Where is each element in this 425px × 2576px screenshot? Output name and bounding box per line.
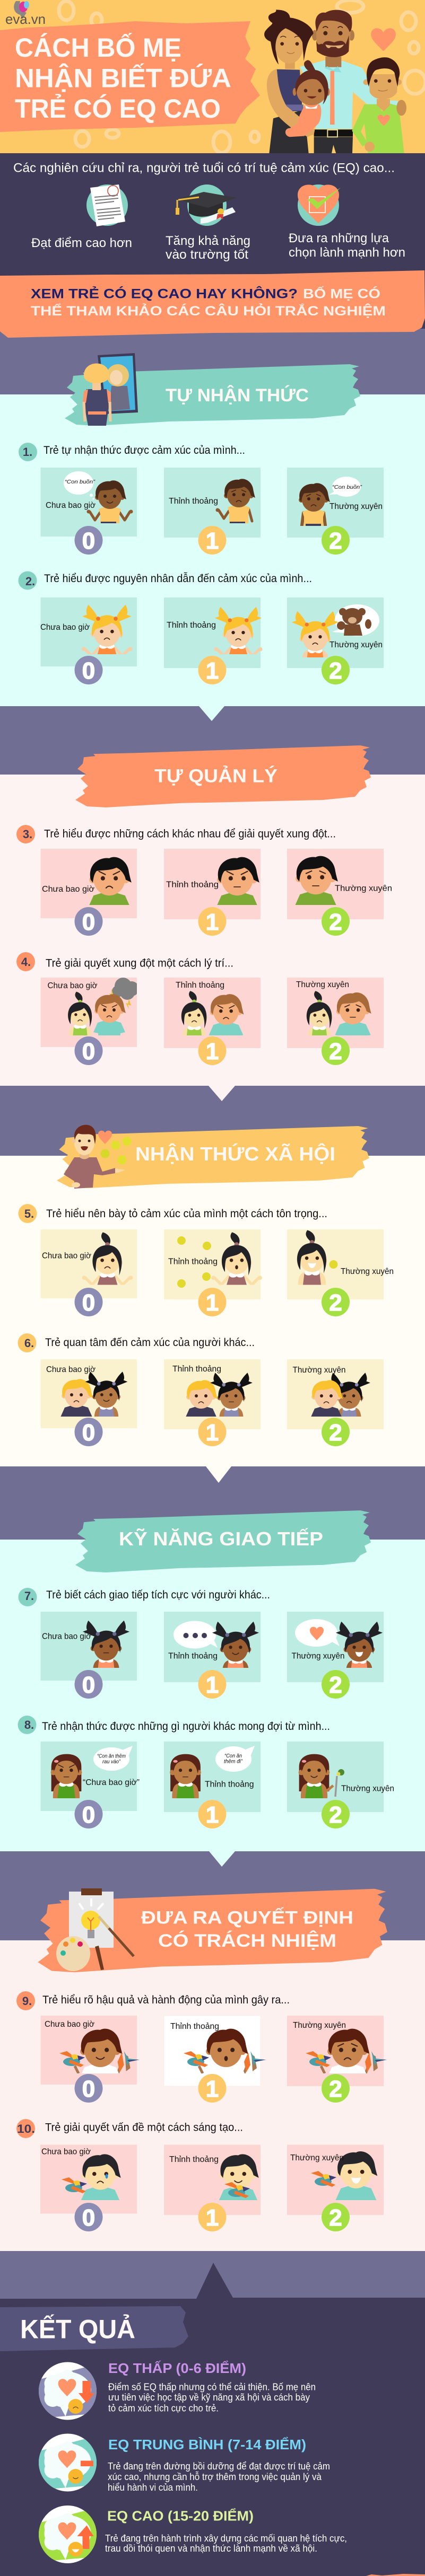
card: never: [40, 468, 137, 555]
label: Chưa bao giờ: [42, 1251, 91, 1261]
card: sometimes: [164, 1612, 261, 1699]
call-to-action band: [0, 270, 425, 338]
icon: brain with minus: [36, 2433, 100, 2492]
question text: Trẻ biết cách giao tiếp tích cực với người khác...: [46, 1589, 270, 1601]
label: Thường xuyên: [329, 502, 383, 511]
score 0: 0: [82, 2205, 95, 2231]
score 2: [322, 656, 350, 684]
label: Thỉnh thoảng: [172, 1365, 221, 1374]
card: sometimes: [164, 1742, 261, 1828]
score 0: [74, 1670, 103, 1699]
score 0: 0: [82, 1290, 95, 1316]
girl and boy frowning: [181, 991, 244, 1035]
description: xúc cao, nhưng cần hỗ trợ thêm trong việc quản lý và: [108, 2471, 322, 2482]
badge 9: 9.: [22, 1994, 32, 2008]
blonde girl one arm out: [214, 606, 263, 654]
label: Thường xuyên: [335, 884, 392, 893]
speech bubble: rau vào”: [102, 1759, 121, 1765]
card: never: [40, 1229, 137, 1316]
question 1: [19, 443, 384, 555]
icon: graduation cap: [176, 184, 237, 226]
label: Chưa bao giờ: [48, 981, 98, 990]
question 7: [18, 1588, 384, 1699]
banner: communication skills: [75, 1510, 371, 1572]
label: Thường xuyên: [341, 1267, 394, 1276]
score 0: 0: [82, 1420, 95, 1446]
label: Chưa bao giờ: [42, 1632, 91, 1641]
description: [105, 2533, 347, 2554]
badge 10: [16, 2119, 35, 2138]
results heading: KẾT QUẢ: [20, 2315, 135, 2344]
score 0: [74, 907, 103, 936]
boy and girl looking: [185, 1373, 253, 1432]
question 9: [16, 1991, 387, 2103]
badge 10: 10.: [17, 2122, 35, 2135]
call-to-action text: [31, 285, 386, 319]
call-to-action text: XEM TRẺ CÓ EQ CAO HAY KHÔNG?: [31, 285, 298, 301]
intro panel: [0, 153, 425, 278]
heading: EQ CAO (15-20 ĐIỂM): [107, 2508, 254, 2524]
score 1: 1: [206, 1420, 219, 1446]
score 0: 0: [82, 1039, 95, 1065]
girl arms crossed: [51, 1754, 82, 1808]
score 2: [322, 907, 350, 936]
label: higher grades: Đạt điểm cao hơn: [31, 236, 132, 250]
score 0: 0: [82, 528, 95, 554]
girl smiling: [212, 1622, 259, 1685]
score 0: [74, 2203, 103, 2231]
heading: EQ THẤP (0-6 ĐIỂM): [108, 2360, 246, 2376]
illustration: family: [264, 10, 406, 153]
card: sometimes: [164, 978, 261, 1065]
score 0: [74, 1418, 103, 1446]
badge 7: 7.: [24, 1589, 34, 1603]
card: often: [287, 849, 392, 936]
banner: responsible decisions: [38, 1889, 387, 1972]
heading: TỰ QUẢN LÝ: [154, 766, 277, 787]
score 1: 1: [206, 658, 219, 684]
fork with broccoli: [327, 1769, 344, 1797]
boy surprised with broken plane: [184, 2029, 266, 2098]
score 2: [322, 2203, 350, 2231]
question text: Trẻ hiểu được nguyên nhân dẫn đến cảm xúc của mình...: [44, 573, 312, 585]
label: Thường xuyên: [292, 1652, 345, 1660]
question 6: [18, 1333, 384, 1446]
card: often: [287, 1359, 384, 1446]
boy sad with broken plane: [306, 2029, 387, 2098]
question text: Trẻ giải quyết vấn đề một cách sáng tạo...: [45, 2122, 243, 2133]
score 2: 2: [329, 528, 342, 554]
label: Thường xuyên: [329, 640, 383, 649]
score 1: [198, 907, 226, 936]
card: never: [40, 1742, 140, 1828]
label: Thường xuyên: [293, 1366, 346, 1375]
badge 3: 3.: [23, 828, 32, 841]
label: Thường xuyên: [293, 2021, 346, 2030]
label: Thỉnh thoảng: [169, 2155, 219, 2164]
thought bubble: “Con buồn”: [65, 479, 96, 485]
label: Thỉnh thoảng: [166, 880, 219, 890]
section 5: responsible decisions: [0, 1888, 425, 2251]
score 2: [322, 2074, 350, 2103]
score 0: [74, 526, 103, 555]
score 2: 2: [329, 2076, 342, 2102]
label: Thường xuyên: [290, 2153, 344, 2162]
score 1: 1: [206, 1039, 219, 1065]
banner: self management: [75, 745, 371, 807]
label: Chưa bao giờ: [45, 2020, 94, 2029]
boy slightly annoyed: [217, 857, 259, 905]
description: trau dồi thói quen và nhận thức lành mạnh về xã hội.: [105, 2543, 317, 2554]
score 1: 1: [206, 909, 219, 935]
badge 2: [18, 572, 37, 590]
heading: KỸ NĂNG GIAO TIẾP: [119, 1527, 323, 1550]
label: Thỉnh thoảng: [168, 1652, 218, 1660]
daughter: [285, 60, 330, 137]
card: never: [40, 849, 137, 936]
question text: Trẻ nhận thức được những gì người khác mong đợi từ mình...: [42, 1720, 330, 1733]
bubble with heart: [295, 1619, 340, 1647]
results panel: [0, 2263, 425, 2576]
question text: Trẻ quan tâm đến cảm xúc của người khác...: [45, 1337, 255, 1349]
boy holding plane: [219, 2154, 259, 2219]
icon: brain with down arrow: [36, 2362, 100, 2420]
title: [15, 32, 231, 124]
badge 4: [16, 952, 35, 971]
badge 5: [18, 1204, 37, 1223]
question 2: [18, 572, 384, 684]
label: better school: [166, 234, 250, 262]
speech bubble: “Con ăn thêm: [97, 1754, 126, 1759]
question 8: [18, 1716, 394, 1828]
description: [108, 2461, 330, 2493]
score 2: [322, 526, 350, 555]
thought bubble: [64, 471, 96, 499]
card: sometimes: [164, 468, 261, 555]
icon: heart with checkmark: [298, 184, 341, 226]
badge 3: [16, 825, 35, 843]
call-to-action text: THỂ THAM KHẢO CÁC CÂU HỎI TRẮC NGHIỆM: [31, 303, 386, 319]
label: Thường xuyên: [296, 980, 349, 989]
score 0: 0: [82, 909, 95, 935]
card: often: [287, 1229, 394, 1316]
boy and girl apart: [60, 1371, 127, 1431]
score 0: [74, 1288, 103, 1316]
description: tỏ cảm xúc tích cực cho trẻ.: [108, 2403, 219, 2413]
hero background: [0, 0, 425, 153]
card: often: [287, 978, 384, 1065]
score 2: [322, 1670, 350, 1699]
girl laughing: [336, 1622, 383, 1685]
score 1: 1: [206, 1290, 219, 1316]
speech bubble: “Con buồn”: [332, 484, 362, 490]
score 2: [322, 1800, 350, 1828]
badge 6: [18, 1333, 36, 1352]
card: never: [40, 1359, 137, 1446]
score 0: [74, 2074, 103, 2103]
question 5: [18, 1204, 394, 1316]
son: [352, 57, 406, 153]
mother: [264, 10, 315, 153]
score 1: [198, 526, 226, 555]
label: Thỉnh thoảng: [169, 497, 218, 506]
badge 5: 5.: [24, 1207, 34, 1220]
emotion faces: [177, 1236, 211, 1288]
speech bubble: [329, 477, 362, 497]
badge 9: [16, 1991, 35, 2010]
heading: ĐƯA RA QUYẾT ĐỊNH: [141, 1907, 353, 1928]
result: high EQ: [36, 2505, 347, 2563]
boy calm: [295, 856, 338, 905]
score 1: 1: [206, 1802, 219, 1828]
question text: Trẻ hiểu được những cách khác nhau để giải quyết xung đột...: [44, 828, 336, 840]
call-to-action text: BỐ MẸ CÓ: [303, 285, 380, 301]
card: never: [40, 2016, 140, 2103]
score 2: 2: [329, 1672, 342, 1698]
label: Chưa bao giờ: [41, 2147, 91, 2157]
badge 8: 8.: [24, 1718, 34, 1731]
badge 8: [18, 1716, 36, 1734]
description: hiểu hành vi của mình.: [108, 2482, 198, 2493]
question text: Trẻ giải quyết xung đột một cách lý trí...: [46, 957, 233, 969]
description: Điểm số EQ thấp nhưng có thể cải thiện. Bố mẹ nên: [108, 2381, 316, 2392]
card: often: [287, 468, 384, 555]
card: sometimes: [164, 1359, 261, 1446]
score 0: 0: [82, 2076, 95, 2102]
score 2: 2: [329, 658, 342, 684]
card: often: [287, 2016, 387, 2103]
card: often: [287, 1742, 394, 1828]
description: [108, 2381, 316, 2413]
girl and boy calm: [307, 991, 371, 1035]
girl eating vegetables: [299, 1754, 329, 1808]
score 1: [198, 2074, 226, 2103]
badge 2: 2.: [25, 575, 35, 588]
description: Trẻ đang trên hành trình xây dựng các mối quan hệ tích cực,: [105, 2533, 347, 2544]
banner: self awareness: [65, 364, 360, 426]
question text: Trẻ hiểu rõ hậu quả và hành động của mình gây ra...: [42, 1994, 290, 2006]
title: CÁCH BỐ MẸ: [15, 32, 181, 63]
section 1: self awareness: [0, 353, 425, 721]
result: low EQ: [36, 2360, 316, 2420]
score 0: [74, 1036, 103, 1065]
girl neutral: [170, 1754, 201, 1808]
title: NHẬN BIẾT ĐỨA: [15, 64, 231, 93]
heading: EQ TRUNG BÌNH (7-14 ĐIỂM): [108, 2437, 306, 2452]
card: often: [287, 1612, 384, 1699]
score 2: 2: [329, 1290, 342, 1316]
score 1: [198, 2203, 226, 2231]
blonde girl shrugging: [82, 604, 133, 654]
score 1: [198, 1418, 226, 1446]
boy smiling, shrugging: [87, 480, 133, 523]
label: “Chưa bao giờ”: [83, 1778, 140, 1787]
boy laughing with repaired plane: [311, 2151, 377, 2219]
girl speaking: [211, 1232, 262, 1285]
score 1: [198, 1036, 226, 1065]
score 1: 1: [206, 528, 219, 554]
card: sometimes: [164, 597, 263, 684]
score 0: 0: [82, 658, 95, 684]
badge 4: 4.: [21, 955, 31, 969]
hero title brush: [0, 21, 260, 132]
icon: brain with up arrow: [36, 2505, 100, 2563]
score 1: [198, 1288, 226, 1316]
heading: NHẬN THỨC XÃ HỘI: [135, 1142, 335, 1165]
label: Chưa bao giờ: [46, 501, 96, 510]
question text: Trẻ hiểu nên bày tỏ cảm xúc của mình một cách tôn trọng...: [46, 1208, 327, 1220]
label: Thỉnh thoảng: [176, 981, 224, 990]
intro text: Các nghiên cứu chỉ ra, người trẻ tuổi có trí tuệ cảm xúc (EQ) cao...: [13, 161, 395, 175]
coral heart: [371, 28, 396, 51]
label: healthier choices: chọn lành mạnh hơn: [289, 245, 405, 260]
label: better school: Tăng khả năng: [166, 234, 250, 248]
label: Thỉnh thoảng: [170, 2022, 219, 2031]
score 1: [198, 656, 226, 684]
label: Chưa bao giờ: [40, 623, 90, 632]
score 1: 1: [206, 1672, 219, 1698]
badge 6: 6.: [24, 1337, 34, 1350]
boy smiling with broken plane: [59, 2029, 140, 2098]
result: medium EQ: [36, 2433, 330, 2493]
badge 7: [18, 1588, 37, 1606]
heading: [141, 1907, 353, 1951]
label: Thỉnh thoảng: [205, 1780, 254, 1789]
score 2: 2: [329, 1420, 342, 1446]
label: Thỉnh thoảng: [168, 1258, 218, 1266]
girl and boy quarrelling: [68, 991, 126, 1035]
section 4: communication skills: [0, 1510, 425, 1867]
label: Chưa bao giờ: [42, 885, 95, 894]
score 1: 1: [206, 2076, 219, 2102]
card: never: [40, 1612, 137, 1699]
speech bubble: thêm đi”: [224, 1759, 243, 1764]
score 2: 2: [329, 2205, 342, 2231]
question 3: [16, 825, 392, 936]
score 1: [198, 1670, 226, 1699]
heading: CÓ TRÁCH NHIỆM: [158, 1931, 336, 1951]
card: sometimes: [164, 849, 261, 936]
score 1: [198, 1800, 226, 1828]
boy sad, one arm out: [215, 479, 255, 523]
label: Chưa bao giờ: [46, 1365, 96, 1374]
label: healthier choices: Đưa ra những lựa: [289, 231, 389, 245]
card: never: [40, 978, 139, 1065]
storm cloud: [109, 978, 139, 1009]
icon: graded paper: [86, 184, 128, 226]
title: TRẺ CÓ EQ CAO: [15, 94, 221, 124]
question 4: [16, 952, 384, 1065]
card: sometimes: [164, 2145, 261, 2231]
speech bubble: [215, 1746, 255, 1772]
girl smiling with happy face: [297, 1230, 327, 1285]
logo eva.vn: eva.vn: [5, 11, 46, 27]
speech bubble: [93, 1746, 133, 1771]
score 0: [74, 656, 103, 684]
description: ưu tiên việc học tập về kỹ năng xã hội và cách bày: [108, 2392, 310, 2403]
label: Thường xuyên: [341, 1784, 394, 1793]
purple background band: [0, 329, 425, 2301]
score 2: 2: [329, 1802, 342, 1828]
card: sometimes: [164, 2016, 266, 2103]
label: healthier choices: [289, 231, 405, 260]
badge 1: [19, 443, 37, 461]
results banner: [0, 2306, 188, 2351]
boy sad, speaking: [299, 483, 330, 526]
score 2: 2: [329, 909, 342, 935]
score 2: [322, 1288, 350, 1316]
score 1: 1: [206, 2205, 219, 2231]
blonde girl sad: [292, 611, 339, 657]
girl shrugging: [82, 1232, 133, 1285]
illustration: easel with light bulb: [56, 1888, 134, 1971]
label: Thỉnh thoảng: [167, 621, 216, 630]
score 0: [74, 1800, 103, 1828]
boy crying with plane: [62, 2154, 121, 2219]
score 2: [322, 1036, 350, 1065]
score 0: 0: [82, 1802, 95, 1828]
score 0: 0: [82, 1672, 95, 1698]
description: Trẻ đang trên đường bồi dưỡng để đạt được trí tuệ cảm: [108, 2461, 330, 2472]
girl comforting boy: [310, 1373, 370, 1432]
question 10: [16, 2119, 384, 2231]
card: never: [40, 597, 137, 684]
question text: Trẻ tự nhận thức được cảm xúc của mình...: [44, 444, 245, 456]
logo eva.vn: [5, 1, 46, 27]
card: sometimes: [164, 1229, 262, 1316]
section 3: social awareness: [0, 1125, 425, 1483]
boy angry: [89, 857, 132, 905]
score 2: [322, 1418, 350, 1446]
banner: social awareness: [57, 1126, 369, 1188]
card: never: [40, 2145, 137, 2231]
card: often: [287, 2145, 384, 2231]
badge 1: 1.: [23, 445, 32, 459]
label: better school: vào trường tốt: [166, 248, 248, 262]
section 2: self management: [0, 745, 425, 1101]
speech bubble: “Con ăn: [224, 1753, 242, 1759]
speech bubble with teddy bear: [332, 604, 379, 636]
card: often: [287, 597, 384, 684]
illustration: man juggling emotions: [64, 1125, 132, 1189]
heading: TỰ NHẬN THỨC: [166, 385, 309, 406]
score 2: 2: [329, 1039, 342, 1065]
father: [300, 10, 398, 153]
icon: girl at mirror: [83, 353, 138, 426]
girl silent: [83, 1621, 129, 1684]
bubble with ellipsis: [174, 1621, 218, 1649]
